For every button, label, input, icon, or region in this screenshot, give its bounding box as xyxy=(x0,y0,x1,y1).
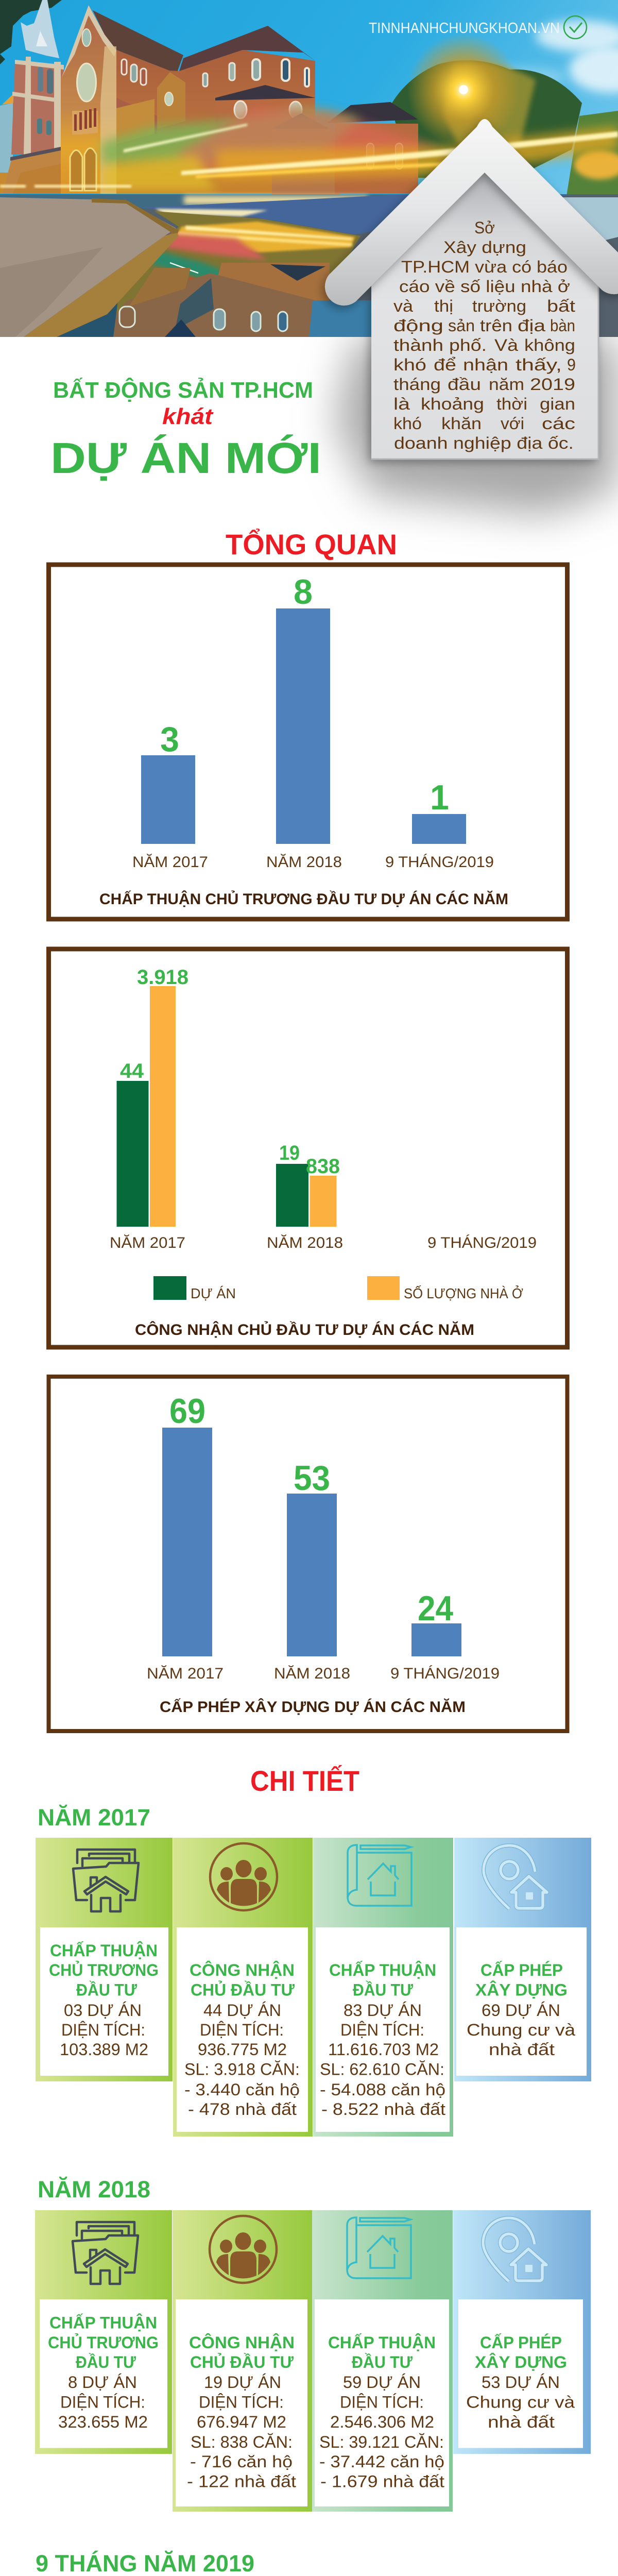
icon: group of people xyxy=(210,1843,277,1910)
card text: 83 DỰ ÁN xyxy=(344,2001,422,2020)
chart panel: công nhận chủ đầu tư xyxy=(48,949,568,1347)
card text xyxy=(49,1941,159,2059)
value labels xyxy=(160,572,449,817)
card text: DIỆN TÍCH: xyxy=(340,2393,424,2411)
value labels: 3.918 xyxy=(137,966,188,989)
card text: - 122 nhà đất xyxy=(187,2472,296,2490)
card 2018: chấp thuận chủ trương xyxy=(35,2210,172,2454)
card text: DIỆN TÍCH: xyxy=(60,2393,145,2411)
card text: 44 DỰ ÁN xyxy=(203,2001,281,2020)
card text xyxy=(467,1961,575,2059)
chart panel: chấp thuận chủ trương đầu tư xyxy=(48,565,568,919)
card text: DIỆN TÍCH: xyxy=(200,2021,284,2039)
house-shaped intro callout: trên xyxy=(480,316,512,335)
card text xyxy=(319,2333,444,2490)
card text: - 37.442 căn hộ xyxy=(319,2452,444,2471)
value labels: 69 xyxy=(169,1392,205,1431)
card text: ĐẦU TƯ xyxy=(353,1980,413,1999)
house-shaped intro callout: Xây dựng xyxy=(443,238,526,257)
title block: DỰ ÁN MỚI xyxy=(50,434,321,482)
title block: BẤT ĐỘNG SẢN TP.HCM xyxy=(53,377,313,403)
section heading: NĂM 2018: NĂM 2018 xyxy=(38,2176,150,2202)
value labels: 44 xyxy=(120,1060,144,1082)
card text xyxy=(320,1961,445,2119)
card text xyxy=(187,2333,296,2490)
house-shaped intro callout: và xyxy=(393,297,413,315)
card text xyxy=(466,2333,575,2431)
card text: SL: 3.918 CĂN: xyxy=(184,2060,300,2078)
house-shaped intro callout: 9 xyxy=(567,355,576,374)
icon: folder with house xyxy=(73,1850,139,1911)
house-shaped intro callout: năm xyxy=(489,375,524,394)
card text: 11.616.703 M2 xyxy=(328,2040,439,2059)
heading: TỔNG QUAN: TỔNG QUAN xyxy=(226,528,397,561)
house-shaped intro callout: cáo về số liệu nhà ở xyxy=(399,277,570,296)
house-shaped intro callout: là xyxy=(393,395,410,413)
category labels xyxy=(132,854,494,871)
icon: blueprint with house xyxy=(348,1845,411,1906)
house-shaped intro callout: bất xyxy=(547,297,575,315)
house-shaped intro callout: với xyxy=(501,414,524,433)
category labels: NĂM 2017 xyxy=(110,1234,185,1251)
card text: XÂY DỰNG xyxy=(475,2353,567,2371)
bars xyxy=(141,608,466,844)
card 2018: chấp thuận đầu tư xyxy=(312,2210,453,2512)
card text: SL: 62.610 CĂN: xyxy=(320,2060,444,2078)
card text: - 3.440 căn hộ xyxy=(184,2080,300,2099)
card text: - 716 căn hộ xyxy=(190,2452,293,2471)
legend: SỐ LƯỢNG NHÀ Ở xyxy=(404,1285,523,1301)
house-shaped intro callout: gian xyxy=(540,395,575,413)
chart caption: CẤP PHÉP XÂY DỰNG DỰ ÁN CÁC NĂM xyxy=(160,1698,466,1716)
card text: 323.655 M2 xyxy=(58,2413,148,2431)
card text xyxy=(184,1961,300,2119)
card text: - 8.522 nhà đất xyxy=(321,2100,445,2119)
card 2017: chấp thuận đầu tư xyxy=(313,1838,453,2137)
card text: 03 DỰ ÁN xyxy=(64,2001,142,2020)
card text: 59 DỰ ÁN xyxy=(343,2373,421,2392)
hero photo: Notre Dame cathedral with light trails xyxy=(0,0,618,337)
card text: XÂY DỰNG xyxy=(475,1980,568,1999)
card text: - 54.088 căn hộ xyxy=(320,2080,445,2099)
value labels: 838 xyxy=(306,1155,340,1178)
house-shaped intro callout: Sở xyxy=(474,218,495,237)
icon: group of people xyxy=(210,2216,277,2283)
icon: location pin with house xyxy=(483,2218,546,2281)
house-shaped intro callout: nhận xyxy=(463,355,508,374)
card text: CHẤP THUẬN xyxy=(50,1941,158,1960)
value labels: 8 xyxy=(294,572,313,612)
card 2018: công nhận chủ đầu tư xyxy=(173,2210,312,2512)
card text: SL: 39.121 CĂN: xyxy=(319,2433,444,2451)
house-shaped intro callout: thành xyxy=(393,336,443,354)
house-shaped intro callout: động xyxy=(393,316,443,335)
card text: 676.947 M2 xyxy=(197,2413,286,2431)
house-shaped intro callout: bàn xyxy=(550,316,575,335)
chart caption: CÔNG NHẬN CHỦ ĐẦU TƯ DỰ ÁN CÁC NĂM xyxy=(135,1321,474,1338)
card text: SL: 838 CĂN: xyxy=(191,2433,293,2451)
section heading: NĂM 2017: NĂM 2017 xyxy=(38,1804,150,1831)
card text: - 1.679 nhà đất xyxy=(320,2472,444,2490)
chart panel: cấp phép xây dựng xyxy=(48,1377,568,1731)
card text: DIỆN TÍCH: xyxy=(340,2021,424,2039)
icon: blueprint with house xyxy=(347,2217,411,2278)
house-shaped intro callout: không xyxy=(524,336,575,354)
card 2017: cấp phép xây dựng xyxy=(454,1838,591,2081)
house-shaped intro callout: 2019 xyxy=(530,375,575,394)
value labels: 3 xyxy=(160,720,179,759)
value labels: 53 xyxy=(294,1459,330,1498)
icon: folder with house xyxy=(73,2222,138,2284)
card text: 103.389 M2 xyxy=(60,2040,148,2059)
house-shaped intro callout: sản xyxy=(448,316,475,335)
card text: 19 DỰ ÁN xyxy=(204,2373,281,2392)
card text: DIỆN TÍCH: xyxy=(199,2393,284,2411)
category labels: NĂM 2018 xyxy=(266,854,342,871)
card text: CHẤP THUẬN xyxy=(49,2313,157,2332)
house-shaped intro callout: TP.HCM vừa có báo xyxy=(401,258,568,276)
card text: 53 DỰ ÁN xyxy=(482,2373,560,2392)
category labels: 9 THÁNG/2019 xyxy=(385,854,494,871)
card 2017: công nhận chủ đầu tư xyxy=(173,1838,313,2137)
house-shaped intro callout: khoảng xyxy=(421,395,484,413)
card text: CÔNG NHẬN xyxy=(189,2333,295,2352)
house-shaped intro callout: thấy, xyxy=(516,355,562,374)
house-shaped intro callout: phố. xyxy=(449,336,487,354)
value labels: 19 xyxy=(279,1142,300,1164)
card text: CHẤP THUẬN xyxy=(328,2333,436,2352)
house shadow on page background xyxy=(335,337,618,515)
legend: DỰ ÁN xyxy=(191,1285,236,1301)
card text: CÔNG NHẬN xyxy=(190,1961,295,1979)
card text: 2.546.306 M2 xyxy=(330,2413,434,2431)
icon: location pin with house xyxy=(484,1845,547,1909)
value labels: 1 xyxy=(430,778,449,817)
house-shaped intro callout: trường xyxy=(472,297,526,315)
card text: - 478 nhà đất xyxy=(188,2100,297,2119)
card text: ĐẦU TƯ xyxy=(76,1980,137,1999)
value labels xyxy=(120,966,340,1178)
card text: 69 DỰ ÁN xyxy=(482,2001,560,2020)
house-shaped intro callout: đầu xyxy=(448,375,481,394)
card text: nhà đất xyxy=(488,2413,555,2431)
logo: TINNHANHCHUNGKHOAN.VN with check mark: TINNHANHCHUNGKHOAN.VN xyxy=(369,20,560,37)
card text: CHỦ ĐẦU TƯ xyxy=(190,2353,294,2371)
card text: CẤP PHÉP xyxy=(480,2333,562,2352)
house-shaped intro callout: để xyxy=(434,355,456,374)
category labels: NĂM 2017 xyxy=(147,1665,224,1682)
card text: nhà đất xyxy=(489,2040,555,2059)
house-shaped intro callout: thị xyxy=(434,297,453,315)
card 2017: chấp thuận chủ trương xyxy=(36,1838,173,2081)
house-shaped intro callout: doanh nghiệp địa ốc. xyxy=(394,434,574,452)
house-shaped intro callout: các xyxy=(542,414,575,433)
legend xyxy=(153,1276,523,1301)
house-shaped intro callout: khó xyxy=(393,414,422,433)
section heading: 9 THÁNG NĂM 2019: 9 THÁNG NĂM 2019 xyxy=(36,2550,254,2576)
title block: khát xyxy=(162,404,214,429)
category labels: NĂM 2018 xyxy=(274,1665,350,1682)
card text: CHỦ TRƯƠNG xyxy=(48,2333,159,2352)
category labels: 9 THÁNG/2019 xyxy=(427,1234,537,1251)
card text xyxy=(48,2313,159,2431)
house-shaped intro callout: địa xyxy=(518,316,545,335)
house-shaped intro callout: Và xyxy=(494,336,518,354)
category labels: 9 THÁNG/2019 xyxy=(390,1665,500,1682)
card text: CẤP PHÉP xyxy=(480,1961,563,1979)
title block xyxy=(50,377,321,482)
house-shaped intro callout: khó xyxy=(393,355,426,374)
card text: 936.775 M2 xyxy=(198,2040,287,2059)
value labels: 24 xyxy=(418,1589,453,1628)
category labels xyxy=(147,1665,500,1682)
card text: CHỦ TRƯƠNG xyxy=(49,1961,159,1979)
house-shaped intro callout: tháng xyxy=(393,375,441,394)
card text: Chung cư và xyxy=(466,2393,575,2411)
chart caption: CHẤP THUẬN CHỦ TRƯƠNG ĐẦU TƯ DỰ ÁN CÁC NĂM xyxy=(99,890,508,908)
heading: CHI TIẾT: CHI TIẾT xyxy=(250,1765,359,1797)
category labels xyxy=(110,1234,537,1251)
card text: ĐẦU TƯ xyxy=(352,2353,413,2371)
card text: DIỆN TÍCH: xyxy=(61,2021,145,2039)
house-shaped intro callout: thời xyxy=(496,395,527,413)
card text: CHẤP THUẬN xyxy=(329,1961,436,1979)
card 2018: cấp phép xây dựng xyxy=(453,2210,591,2454)
bars xyxy=(162,1428,461,1656)
category labels: NĂM 2018 xyxy=(267,1234,343,1251)
category labels: NĂM 2017 xyxy=(132,854,208,871)
house-shaped intro callout: khăn xyxy=(441,414,482,433)
card text: Chung cư và xyxy=(467,2021,575,2039)
card text: ĐẦU TƯ xyxy=(76,2353,136,2371)
house-shaped intro callout xyxy=(325,119,618,459)
value labels xyxy=(169,1392,453,1628)
card text: 8 DỰ ÁN xyxy=(68,2373,137,2392)
card text: CHỦ ĐẦU TƯ xyxy=(191,1980,295,1999)
bars xyxy=(116,986,337,1227)
